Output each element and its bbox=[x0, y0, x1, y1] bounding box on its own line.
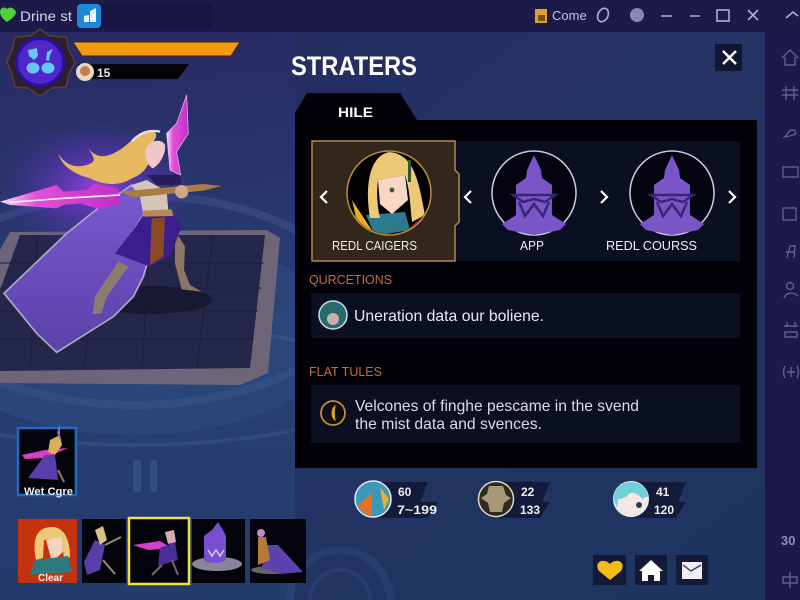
row: qurcetions bbox=[311, 293, 740, 338]
thumbnail: purple relic bbox=[192, 519, 245, 583]
app name: Drine st bbox=[20, 8, 72, 24]
hero character bbox=[0, 95, 222, 352]
heading: flat tules: FLAT TULES bbox=[309, 364, 382, 379]
thumbnail: selected hero card: Wet Cgre bbox=[24, 486, 73, 498]
stat: player three bbox=[614, 482, 686, 518]
torso bbox=[132, 180, 168, 214]
card label: REDL CAIGERS bbox=[332, 238, 417, 253]
level bar bbox=[76, 63, 189, 81]
health bar bbox=[73, 42, 240, 56]
window label: Come bbox=[552, 8, 587, 23]
icon: blue emblem bbox=[26, 48, 54, 74]
right sidebar bbox=[764, 32, 800, 600]
selected card bbox=[312, 141, 459, 261]
thumbnail: hero pose three bbox=[250, 519, 306, 583]
tab label: HILE bbox=[338, 104, 373, 120]
card: redl courses bbox=[606, 151, 714, 253]
thumbnail: hero pose one bbox=[82, 519, 126, 583]
thumbnail: clear bbox=[18, 519, 77, 584]
spear shaft and hand bbox=[120, 175, 222, 198]
stat: player three: 120 bbox=[654, 503, 674, 517]
sidebar number: 30 bbox=[781, 533, 795, 548]
level bar: 15 bbox=[97, 66, 111, 80]
icon: orange app bbox=[535, 9, 547, 23]
spear bbox=[0, 95, 188, 209]
button: heart bbox=[593, 555, 626, 585]
stat: player two bbox=[478, 482, 550, 518]
main panel bbox=[295, 93, 757, 468]
row: flat tules bbox=[311, 385, 740, 443]
player portrait badge bbox=[7, 29, 75, 96]
thumbnail: selected hero card bbox=[18, 424, 76, 498]
icon: blue chart app bbox=[77, 4, 101, 28]
row: qurcetions: Uneration data our boliene. bbox=[354, 308, 544, 325]
row: flat tules: the mist data and svences. bbox=[355, 416, 542, 433]
arena platform bbox=[0, 230, 280, 385]
stat: player two: 133 bbox=[520, 503, 540, 517]
close button bbox=[715, 44, 742, 71]
title bar bbox=[0, 0, 800, 32]
button: home bbox=[635, 555, 667, 585]
thumbnail: hero pose two, selected bbox=[129, 518, 189, 584]
card label: REDL COURSS bbox=[606, 238, 697, 253]
stat: player one bbox=[355, 481, 438, 518]
carousel arrows bbox=[321, 191, 735, 203]
heading: qurcetions: QURCETIONS bbox=[309, 272, 392, 287]
sidebar icons bbox=[782, 50, 798, 588]
thumbnail: clear: Clear bbox=[38, 573, 63, 584]
portrait: blonde girl bbox=[352, 152, 425, 234]
stat: player three: 41 bbox=[656, 485, 670, 499]
button: mail bbox=[676, 555, 708, 585]
icon: green heart bbox=[0, 8, 16, 22]
window controls bbox=[596, 7, 798, 23]
skirt bbox=[115, 213, 182, 267]
row: flat tules: Velcones of finghe pescame in the svend bbox=[355, 398, 639, 415]
hair bbox=[58, 130, 156, 184]
stat: player one: 7~199 bbox=[397, 503, 437, 517]
panel title: STRATERS bbox=[291, 51, 417, 81]
cape bbox=[4, 185, 148, 352]
legs bbox=[93, 230, 202, 314]
stat: player one: 60 bbox=[398, 485, 412, 499]
stat: player two: 22 bbox=[521, 485, 535, 499]
tiara bbox=[132, 131, 160, 142]
face bbox=[145, 141, 165, 168]
card label: APP bbox=[520, 238, 544, 253]
card: app bbox=[492, 151, 576, 253]
character card row bbox=[455, 141, 740, 261]
thumbnail row bbox=[18, 518, 306, 584]
